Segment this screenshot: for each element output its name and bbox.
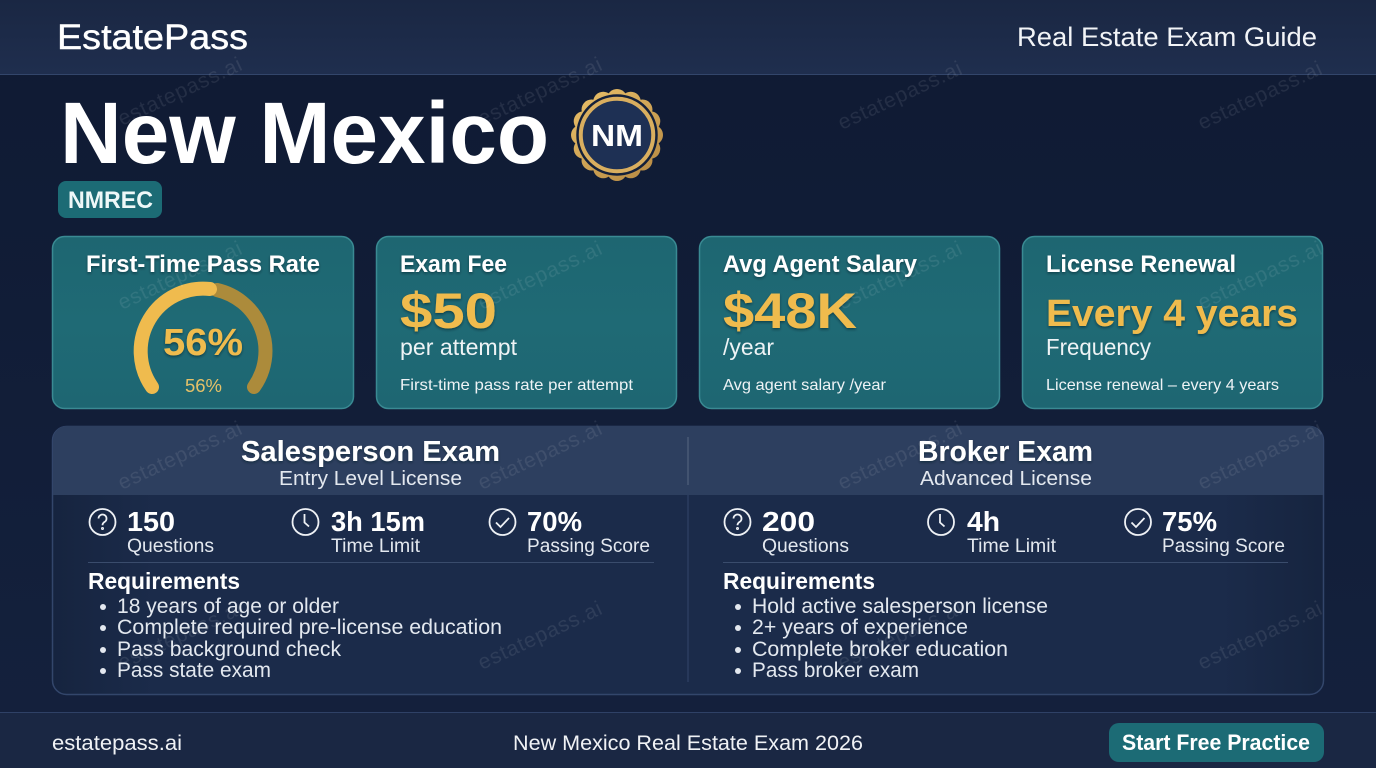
title: New Mexico [60,85,549,182]
watermarks: estatepass.ai [834,57,966,135]
gauge value: 56% [163,322,243,364]
watermarks: estatepass.ai [114,237,246,315]
watermarks: estatepass.ai [834,417,966,495]
requirements list: Hold active salesperson license [752,595,1048,618]
footer title: New Mexico Real Estate Exam 2026 [513,732,863,755]
watermarks: estatepass.ai [114,53,246,131]
icon: check [490,509,516,535]
watermarks: estatepass.ai [114,417,246,495]
watermarks: estatepass.ai [474,417,606,495]
icon: clock [292,509,318,535]
broker exam [723,436,1288,682]
footer site: estatepass.ai [52,732,182,755]
stat: time limit: Time Limit [967,536,1057,557]
watermarks: estatepass.ai [1194,597,1326,675]
panel: average agent salary: Avg agent salary /year [723,377,887,394]
panel: average agent salary: Avg Agent Salary [723,251,918,278]
broker subheading: Advanced License [920,468,1092,490]
panel: license renewal: Frequency [1046,334,1151,360]
panel: exam fee: Exam Fee [400,251,507,278]
stat: passing score: 70% [527,506,582,537]
panel: license renewal: License renewal – every 4 years [1046,377,1279,394]
requirements list: Complete required pre-license education [117,616,502,639]
requirements list: 2+ years of experience [752,616,968,639]
header guide label: Real Estate Exam Guide [1017,22,1317,52]
stat: questions: Questions [762,536,849,557]
watermarks: estatepass.ai [1194,57,1326,135]
stat: questions [127,506,214,557]
stat: questions: 200 [762,506,815,537]
stat: time limit [331,506,425,557]
panel: license renewal: License Renewal [1046,251,1236,278]
icon: state seal badge: NM [591,118,643,153]
panel: license renewal [1022,236,1322,408]
broker heading: Broker Exam [918,436,1093,468]
salesperson heading: Salesperson Exam [241,436,500,468]
stat: passing score: 75% [1162,506,1217,537]
agency badge: NMREC [58,181,162,218]
requirements list: 18 years of age or older [117,595,339,618]
panel: exam fee [376,236,676,408]
panel: average agent salary: /year [723,334,774,360]
requirements list: Complete broker education [752,638,1008,661]
requirements list: Pass broker exam [752,659,919,682]
stat: passing score [1162,506,1285,557]
panel: average agent salary: $48K [723,283,857,339]
panel: average agent salary [700,236,1000,408]
heading: First-Time Pass Rate [86,251,320,278]
stat: time limit: 4h [967,506,1000,537]
stat: passing score: Passing Score [1162,536,1285,557]
watermarks: estatepass.ai [474,53,606,131]
stat: passing score: Passing Score [527,536,650,557]
header bar [0,0,1376,75]
watermarks: estatepass.ai [1194,237,1326,315]
requirements list: Pass background check [117,638,341,661]
gauge chart [141,289,265,387]
watermarks: estatepass.ai [474,597,606,675]
button: start free practice: Start Free Practice [1122,730,1310,755]
panel: license renewal: Every 4 years [1046,293,1298,335]
gauge caption: 56% [185,376,222,396]
stat: questions: 150 [127,506,175,537]
icon: clock [928,509,954,535]
watermarks: estatepass.ai [834,237,966,315]
watermarks: estatepass.ai [834,597,966,675]
agency badge: NMREC: NMREC [68,187,153,214]
requirements list [735,595,1048,682]
icon: question [724,509,750,535]
button: start free practice [1109,723,1324,762]
stat: questions: Questions [127,536,214,557]
panel: exam fee: $50 [400,283,497,339]
stat: time limit: Time Limit [331,536,421,557]
stat: questions [762,506,849,557]
footer bar [0,712,1376,768]
icon: check [1125,509,1151,535]
panel: exam comparison [52,426,1324,694]
icon: question [90,509,116,535]
panel: first-time pass rate [52,236,354,408]
stat: time limit: 3h 15m [331,506,425,537]
requirements list: Pass state exam [117,659,271,682]
watermarks: estatepass.ai [1194,417,1326,495]
panel: exam fee: per attempt [400,334,518,360]
watermarks: estatepass.ai [114,597,246,675]
watermarks: estatepass.ai [474,237,606,315]
brand name: EstatePass [57,18,248,57]
requirements heading: Requirements [88,568,240,594]
requirements list [100,595,502,682]
panel: exam fee: First-time pass rate per attempt [400,377,634,394]
salesperson subheading: Entry Level License [279,468,462,490]
icon: state seal badge [571,89,663,181]
salesperson exam [88,436,654,682]
requirements heading: Requirements [723,568,875,594]
watermarks [114,53,1326,675]
stat: passing score [527,506,650,557]
stat: time limit [967,506,1057,557]
